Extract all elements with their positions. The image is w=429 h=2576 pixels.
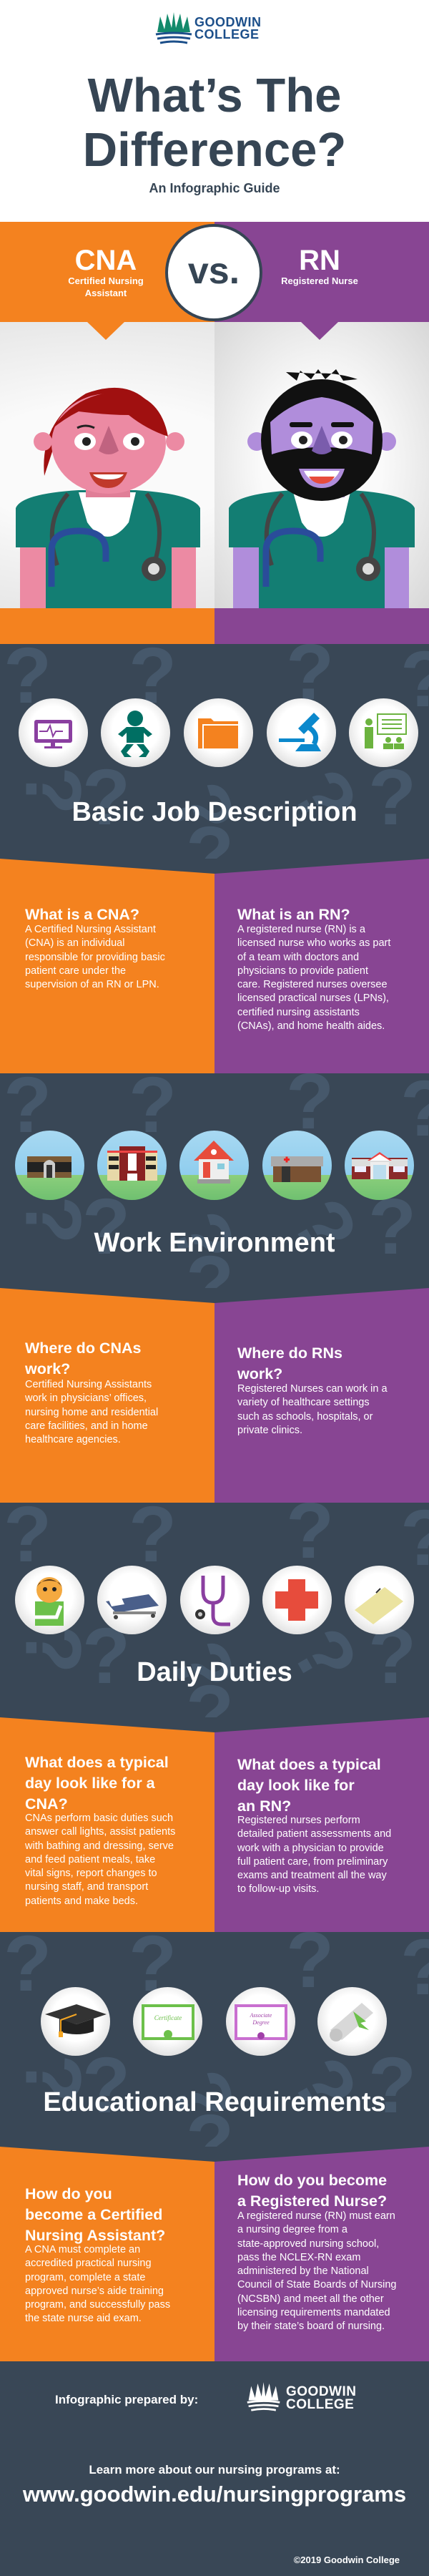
icon: graduation cap [41,1987,110,2056]
panel: what is an RN: of a team with doctors and [237,952,359,963]
title: What’s The [88,69,341,122]
footer [0,2361,429,2576]
panel: RN typical day: exams and treatment all the way [237,1870,387,1881]
panel: become an RN [214,2147,429,2361]
panel: become a CNA: accredited practical nursing [25,2258,152,2269]
section: work environment: ? [82,1183,130,1271]
woman [16,388,200,608]
panel: where do CNAs work: Where do CNAs [25,1340,141,1357]
section: educational requirements: ? [9,2054,97,2103]
prepared by: Infographic prepared by: [55,2393,198,2406]
panel: what is an RN: certified nursing assistants [237,1007,360,1018]
learn more: Learn more about our nursing programs at: [89,2463,340,2477]
panel: become an RN: (NCSBN) and meet all the other [237,2293,384,2305]
icon: associate degree: Degree [252,2019,270,2026]
icon: diploma scroll [317,1987,387,2056]
icon: associate degree [226,1987,295,2056]
panel: RN typical day: day look like for [237,1777,355,1794]
icon: stethoscope [180,1566,250,1634]
section: educational requirements: ? [275,2043,375,2129]
panel: what is a CNA: What is a CNA? [25,906,139,923]
panel: where do CNAs work: work in physicians’ offices, [25,1392,147,1404]
panel: become a CNA [0,2147,214,2361]
panel: CNA typical day: What does a typical [25,1754,169,1771]
panel: RN typical day: full patient care, from preliminary [237,1856,388,1868]
panel: RN typical day: Registered nurses perform [237,1815,360,1826]
panel: RN typical day [214,1717,429,1932]
copyright: ©2019 Goodwin College [294,2555,400,2565]
panel: become an RN: state-approved nursing school, [237,2238,379,2250]
section: work environment: ? [9,1196,97,1244]
heading: basic job description: Basic Job Description [72,797,358,827]
CNA header: Certified Nursing [68,275,144,286]
panel: become an RN: How do you become [237,2172,387,2189]
RN header: Registered Nurse [281,275,358,286]
panel: what is an RN: licensed nurse who works as part [237,937,390,949]
panel: RN typical day: detailed patient assessments and [237,1828,391,1840]
icon: patient with sling [15,1566,84,1634]
RN header: RN [299,245,340,276]
panel: what is an RN: What is an RN? [237,906,350,923]
panel: RN typical day: an RN? [237,1797,291,1815]
section: work environment: ? [154,1200,252,1275]
icon: apartment [97,1131,167,1200]
icon: monitor [19,698,88,767]
icon: microscope [267,698,336,767]
man [229,369,415,608]
icon: red cross [262,1566,332,1634]
panel: become an RN: by their state’s board of nursing. [237,2321,385,2332]
logo: Goodwin College [156,12,262,44]
panel: what is a CNA: (CNA) is an individual [25,937,124,949]
section: educational requirements [0,1932,429,2147]
vs circle [165,224,262,321]
panel: CNA typical day: day look like for a [25,1775,155,1792]
icon: folder [345,1566,414,1634]
panel: what is an RN: licensed practical nurses (LPNs), [237,992,389,1004]
panel: become an RN: Council of State Boards of Nursing [237,2279,396,2290]
CNA header: CNA [75,245,137,276]
color bars [0,608,429,644]
heading: educational requirements: Educational Requirements [43,2087,386,2117]
panel: what is a CNA: A Certified Nursing Assistant [25,924,156,935]
heading: work environment: Work Environment [94,1228,335,1258]
CNA header: Assistant [85,288,127,298]
icon: clinic [262,1131,332,1200]
icon: associate degree: Associate [250,2012,272,2019]
section: work environment: ? [275,1184,375,1270]
panel: where do RNs work: Registered Nurses can work in a [237,1383,388,1395]
section: educational requirements: ? [82,2041,130,2129]
panel: what is a CNA: responsible for providing basic [25,952,165,963]
heading: daily duties: Daily Duties [137,1657,292,1687]
panel: where do CNAs work: care facilities, and in home [25,1420,148,1432]
panel: become a CNA: How do you [25,2185,112,2202]
section: educational requirements: ? [154,2059,252,2134]
panel: CNA typical day: CNAs perform basic duties such [25,1813,173,1824]
logo: white Goodwin College: COLLEGE [286,2397,354,2412]
panel: become an RN: pass the NCLEX-RN exam [237,2252,360,2263]
logo: Goodwin College: COLLEGE [194,27,260,42]
icon: house [179,1131,249,1200]
comparison header band [0,222,429,322]
panel: where do RNs work [214,1288,429,1503]
panel: become a CNA: program, complete a state [25,2272,145,2283]
panel: what is an RN: (CNAs), and home health aides. [237,1020,385,1032]
logo: Goodwin College: GOODWIN [194,15,262,29]
panel: become a CNA: approved nurse’s aide training [25,2285,164,2297]
panel: become a CNA: Nursing Assistant? [25,2227,165,2244]
section: daily duties: ? [9,1625,97,1674]
icon: hospital bed [97,1566,167,1634]
section: work environment: ? [368,1183,416,1271]
panel: what is an RN: care. Registered nurses oversee [237,979,388,990]
section: basic job description: ? [275,755,375,841]
panel: CNA typical day: answer call lights, assist patients [25,1826,175,1838]
icon: hospital [345,1131,414,1200]
panel: what is an RN: physicians to provide patient [237,965,368,977]
section: work environment [0,1073,429,1288]
panel: become a CNA: the state nurse aid exam. [25,2313,142,2324]
panel: RN typical day: What does a typical [237,1756,381,1773]
logo: white Goodwin College [247,2382,356,2412]
panel: CNA typical day: patients and make beds. [25,1896,138,1907]
section: basic job description: ? [154,771,252,846]
panel: where do CNAs work: healthcare agencies. [25,1434,121,1445]
panel: where do RNs work: variety of healthcare settings [237,1397,370,1408]
panel: become an RN: a nursing degree from a [237,2224,347,2235]
panel: become a CNA: A CNA must complete an [25,2244,140,2255]
icon: folder [184,698,253,767]
panel: where do CNAs work: work? [25,1360,70,1377]
title: Difference? [83,123,346,177]
panel: become an RN: a Registered Nurse? [237,2192,387,2210]
section: daily duties: ? [368,1612,416,1700]
vs circle: vs. [188,250,240,292]
header background [0,0,429,222]
panel: become an RN: administered by the National [237,2265,369,2277]
pointers [87,322,124,340]
panel: where do RNs work: such as schools, hospitals, or [237,1411,373,1423]
panel: RN typical day: to follow-up visits. [237,1883,319,1895]
nurse illustrations [0,322,429,608]
panel: CNA typical day: with bathing and dressing, serve [25,1840,174,1852]
panel: become a CNA: become a Certified [25,2206,162,2223]
section: basic job description: ? [368,753,416,841]
section: basic job description [0,644,429,859]
icon: certificate [133,1987,202,2056]
panel: what is a CNA [0,859,214,1073]
panel: become a CNA: program, and successfully pass [25,2299,170,2311]
section: daily duties: ? [154,1629,252,1704]
panel: RN typical day: work with a physician to provide [237,1843,384,1854]
section: basic job description: ? [82,753,130,841]
section: basic job description: ? [9,766,97,815]
panel: CNA typical day [0,1717,214,1932]
section: daily duties: ? [275,1614,375,1699]
panel: CNA typical day: nursing staff, and transport [25,1881,148,1893]
section: educational requirements: ? [368,2041,416,2129]
panel: what is an RN [214,859,429,1073]
logo: white Goodwin College: GOODWIN [286,2384,356,2399]
title [83,69,346,177]
RN header [214,222,429,322]
section: daily duties: ? [82,1612,130,1700]
panel: what is a CNA: patient care under the [25,965,126,977]
panel: where do CNAs work: Certified Nursing Assistants [25,1379,152,1390]
panel: where do RNs work: private clinics. [237,1425,302,1436]
panel: become an RN: licensing requirements mandated [237,2307,390,2318]
panel: become an RN: A registered nurse (RN) must earn [237,2210,395,2222]
panel: CNA typical day: CNA? [25,1795,68,1813]
panel: where do CNAs work: nursing home and residential [25,1407,158,1418]
icon: certificate: Certificate [154,2014,182,2021]
panel: where do CNAs work [0,1288,214,1503]
panel: what is a CNA: supervision of an RN or LPN. [25,979,159,990]
icon: baby [101,698,170,767]
CNA header [0,222,214,322]
panel: CNA typical day: vital signs, report changes to [25,1868,157,1879]
icon: teacher [349,698,418,767]
panel: where do RNs work: work? [237,1365,282,1382]
subtitle: An Infographic Guide [149,181,280,195]
section: daily duties [0,1503,429,1717]
url: www.goodwin.edu/nursingprograms [23,2482,406,2507]
panel: where do RNs work: Where do RNs [237,1345,342,1362]
panel: CNA typical day: and feed patient meals, take [25,1854,155,1865]
panel: what is an RN: A registered nurse (RN) is a [237,924,365,935]
icon: office building [15,1131,84,1200]
